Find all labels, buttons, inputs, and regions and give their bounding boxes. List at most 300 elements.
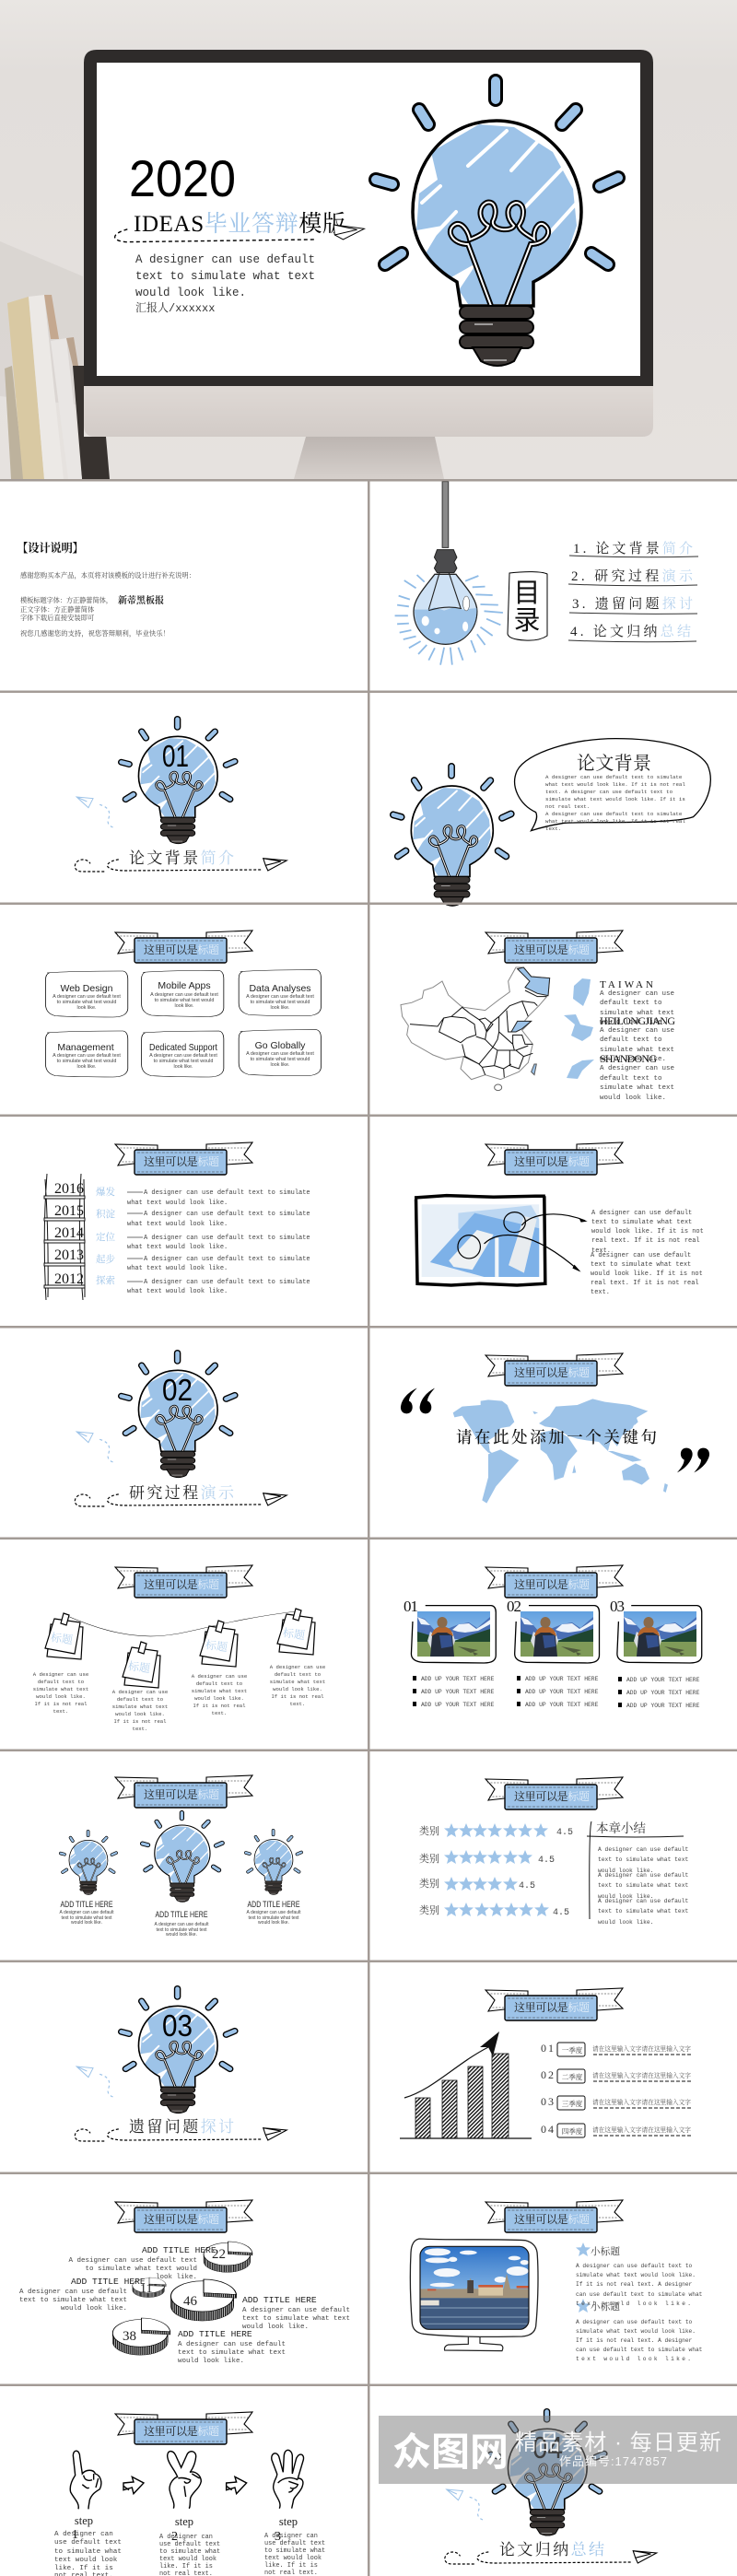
hand-drawn monitor with city photo <box>410 2239 538 2351</box>
annotation text: A designer can use default <box>591 1210 692 1217</box>
card outlines <box>45 970 321 1077</box>
step text: use default text <box>159 2541 220 2548</box>
step numbers: 2 <box>171 2530 178 2544</box>
frame numbers: 02 <box>507 1598 521 1615</box>
title ribbon <box>485 1353 623 1386</box>
bubble text: text. <box>545 825 561 832</box>
annotation text <box>591 1210 704 1296</box>
note 1 <box>45 1613 83 1659</box>
summary panel: would look like. <box>598 1868 653 1874</box>
heading: 【设计说明】 <box>17 541 84 555</box>
step numbers: 1 <box>72 2528 78 2542</box>
rating rows: 4.5 <box>556 1828 573 1838</box>
slide: timeline ladder <box>44 1142 310 1300</box>
note 2: 标题 <box>127 1658 151 1675</box>
card text: A designer can use default text <box>53 994 121 1000</box>
hero bulb <box>376 81 618 366</box>
subheads and stars: 小标题 <box>591 2245 621 2257</box>
chart legend <box>541 2042 692 2137</box>
timeline text: A designer can use default text to simulate <box>144 1279 310 1286</box>
subheads and stars: 小标题 <box>591 2301 621 2313</box>
annotation text: would look like. If it is not <box>591 1270 703 1278</box>
watermark banner: 作品编号:1747857 <box>559 2454 667 2468</box>
step text: to simulate what <box>264 2547 325 2555</box>
step text: A designer can <box>54 2531 113 2538</box>
rating rows: 4.5 <box>519 1881 535 1891</box>
bubble text: what text would look like. If it is not real <box>545 818 685 825</box>
contents list: 1. 论文背景简介 <box>573 540 693 556</box>
note captions: text. <box>212 1710 227 1716</box>
bulb captions: text to simulate what text <box>61 1915 112 1921</box>
pie values: 46 <box>183 2294 197 2309</box>
note 4 <box>277 1609 315 1655</box>
wall background <box>0 0 737 479</box>
bulb <box>393 767 511 906</box>
step labels: step <box>279 2515 298 2528</box>
photo 1 <box>417 1611 490 1657</box>
card text: look like. <box>175 1003 193 1009</box>
title ribbon <box>115 1775 252 1808</box>
stage labels: 定位 <box>96 1232 115 1243</box>
faint plane <box>76 1432 113 1462</box>
card text: look like. <box>271 1005 289 1011</box>
summary panel: A designer can use default <box>598 1898 688 1904</box>
slide: monitor photo <box>410 2200 703 2362</box>
map captions: HEILONGJIANG <box>600 1014 675 1027</box>
bulb captions: ADD TITLE HERE <box>247 1900 300 1910</box>
pie captions <box>19 2245 350 2365</box>
chart legend: 02 <box>541 2068 554 2081</box>
slide: three bulbs <box>60 1775 301 1938</box>
notes text: 字体下载后直接安装即可 <box>20 614 94 622</box>
section 02 slide <box>75 1352 287 1506</box>
frame numbers: 01 <box>404 1598 418 1615</box>
title ribbon <box>485 1777 623 1809</box>
card text: Go Globally <box>255 1040 306 1051</box>
watermark banner: 众图网 <box>392 2430 509 2474</box>
title ribbon <box>485 1565 623 1598</box>
title ribbon <box>485 931 623 963</box>
rating rows: 类别 <box>419 1852 439 1865</box>
bullet list: ADD UP YOUR TEXT HERE <box>525 1702 599 1708</box>
notes text: 正文字体：方正静蕾简体 <box>20 605 95 614</box>
bulb 02 <box>122 1352 235 1478</box>
pie values: 38 <box>123 2329 136 2344</box>
summary panel: A designer can use default <box>598 1846 688 1853</box>
timeline text: what text would look like. <box>127 1288 228 1295</box>
China map <box>401 967 550 1091</box>
title ribbon <box>485 1142 623 1175</box>
stage labels: 起步 <box>96 1253 115 1265</box>
map captions <box>600 979 675 1102</box>
rating rows: 4.5 <box>538 1856 555 1866</box>
contents list: 3. 遗留问题探讨 <box>572 595 693 612</box>
monitor bezel <box>84 50 653 386</box>
bulb captions: text to simulate what text <box>156 1927 207 1933</box>
bubble text: what text would look like. If it is not real <box>545 781 685 788</box>
monitor text: If it is not real text. A designer <box>576 2281 693 2288</box>
card text: look like. <box>77 1064 96 1070</box>
notes text: 新蒂黑板报 <box>118 594 164 606</box>
bubble text: simulate what text would look like. If it is <box>545 796 685 802</box>
ladder years: 2014 <box>54 1225 84 1241</box>
bulb captions: ADD TITLE HERE <box>155 1910 208 1920</box>
rating rows: 4.5 <box>553 1908 569 1918</box>
title ribbon: 这里可以是标题 <box>144 1154 219 1168</box>
title ribbon: 这里可以是标题 <box>144 1577 219 1591</box>
section 03 slide <box>75 1988 287 2141</box>
title ribbon <box>115 931 252 963</box>
pie captions: ADD TITLE HERE <box>178 2329 252 2339</box>
step numbers: 3 <box>275 2530 281 2544</box>
pie captions: would look like. <box>178 2358 244 2365</box>
summary panel <box>587 1821 688 1926</box>
title ribbon: 这里可以是标题 <box>514 943 590 956</box>
monitor text: simulate what text would look like. <box>576 2328 696 2335</box>
card text: to simulate what text would <box>251 1000 310 1005</box>
growth arrow <box>404 2032 499 2098</box>
slide: star ratings <box>419 1777 688 1926</box>
keyword sentence: 请在此处添加一个关键句 <box>456 1428 657 1446</box>
Taiwan shape <box>573 978 591 1006</box>
pie captions: text to simulate what text <box>242 2315 350 2323</box>
title ribbon: 这里可以是标题 <box>514 1365 590 1379</box>
card text: look like. <box>271 1062 289 1068</box>
card text: to simulate what text would <box>57 1000 116 1005</box>
timeline text: what text would look like. <box>127 1221 228 1228</box>
bulb captions: A designer can use default <box>155 1922 209 1927</box>
pie 11 <box>133 2277 166 2298</box>
map captions: default text to <box>600 1036 662 1044</box>
card text: A designer can use default text <box>150 992 218 998</box>
bulb captions: A designer can use default <box>60 1910 114 1915</box>
quote marks <box>401 1388 709 1472</box>
pie 22 <box>204 2242 252 2272</box>
contents list: 2. 研究过程演示 <box>571 568 694 584</box>
map captions: default text to <box>600 1075 662 1083</box>
title ribbon: 这里可以是标题 <box>514 1154 590 1168</box>
number 01: 01 <box>162 739 189 773</box>
timeline text: what text would look like. <box>127 1265 228 1272</box>
note 3: 标题 <box>205 1637 228 1654</box>
dashed trail <box>75 1493 287 1506</box>
chart legend: 请在这里输入文字请在这里输入文字 <box>592 2071 691 2079</box>
bulb captions: would look like. <box>166 1932 197 1938</box>
slide: growth bar chart <box>400 1988 692 2138</box>
card text: look like. <box>174 1064 193 1070</box>
hero: desktop monitor scene <box>0 0 737 479</box>
map captions: A designer can use <box>600 1065 674 1072</box>
section title: 论文背景简介 <box>129 849 234 867</box>
hero title: IDEAS毕业答辩模版 <box>134 211 345 237</box>
faint plane <box>447 2489 484 2520</box>
slide: world map quote <box>401 1353 709 1504</box>
step text: use default text <box>54 2539 122 2547</box>
pie 46 <box>170 2279 237 2321</box>
summary panel: A designer can use default <box>598 1872 688 1879</box>
monitor text: A designer can use default text to <box>576 2319 693 2325</box>
chart legend: 04 <box>541 2123 554 2136</box>
step numbers <box>72 2528 281 2544</box>
note captions: simulate what text <box>112 1704 168 1710</box>
bullet list: ADD UP YOUR TEXT HERE <box>626 1677 700 1683</box>
pie captions: would look like. <box>61 2305 127 2313</box>
contents label box: 录 <box>513 606 541 636</box>
step text <box>54 2531 325 2576</box>
timeline text: A designer can use default text to simulate <box>144 1256 310 1263</box>
map captions: would look like. <box>600 1056 666 1063</box>
bulb captions: would look like. <box>71 1920 102 1926</box>
slide: hanging notes <box>33 1565 325 1732</box>
title ribbon: 这里可以是标题 <box>144 943 219 956</box>
annotation text: would look like. If it is not <box>591 1228 704 1235</box>
chart legend: 请在这里输入文字请在这里输入文字 <box>592 2125 691 2134</box>
card text: A designer can use default text <box>246 994 314 1000</box>
slide: three hand steps <box>54 2412 325 2576</box>
note captions: simulate what text <box>192 1688 247 1694</box>
frame numbers <box>404 1598 625 1615</box>
title ribbon: 这里可以是标题 <box>144 1787 219 1801</box>
map captions: default text to <box>600 1000 662 1007</box>
monitor text: can use default text to simulate what <box>576 2291 703 2298</box>
annotation text: text to simulate what text <box>591 1219 692 1226</box>
pie values: 11 <box>140 2282 152 2296</box>
contents label box <box>508 572 547 640</box>
timeline text: what text would look like. <box>127 1200 228 1207</box>
hero dashed trail and paper plane <box>115 225 364 242</box>
ladder years: 2013 <box>54 1247 84 1263</box>
slide: table of contents <box>395 482 698 665</box>
note captions: If it is not real <box>193 1703 246 1709</box>
title ribbon: 这里可以是标题 <box>144 2424 219 2438</box>
bullet list: ADD UP YOUR TEXT HERE <box>421 1676 495 1682</box>
summary panel: text to simulate what text <box>598 1882 688 1889</box>
title ribbon <box>115 2412 252 2444</box>
monitor text <box>576 2263 703 2362</box>
notes text: 祝您几感谢您的支持，祝您答辩顺利，毕业快乐！ <box>20 629 170 638</box>
chart legend: 三季度 <box>562 2099 583 2108</box>
title ribbon: 这里可以是标题 <box>514 2212 590 2226</box>
timeline text: what text would look like. <box>127 1244 228 1251</box>
map captions: simulate what text <box>600 1084 674 1092</box>
note captions: simulate what text <box>270 1679 325 1685</box>
annotation text: text. <box>591 1289 610 1296</box>
pie values <box>123 2247 226 2344</box>
monitor stand <box>294 437 444 479</box>
bar chart <box>400 2054 532 2138</box>
title ribbon: 这里可以是标题 <box>144 2212 219 2226</box>
hero description: text to simulate what text <box>135 270 315 283</box>
annotation text: real text. If it is not real <box>591 1280 699 1287</box>
step labels: step <box>75 2514 93 2527</box>
title ribbon <box>115 1142 252 1175</box>
card text: Mobile Apps <box>158 980 211 991</box>
map captions: would look like. <box>600 1019 666 1026</box>
timeline text: A designer can use default text to simulate <box>144 1211 310 1218</box>
monitor text: can use default text to simulate what <box>576 2347 703 2353</box>
photo 2 <box>521 1611 593 1657</box>
Shandong shape <box>567 1060 594 1079</box>
speech bubble <box>515 739 710 831</box>
monitor text: text would look like. <box>576 2301 691 2307</box>
timeline text: A designer can use default text to simulate <box>144 1189 310 1197</box>
number 04: 04 <box>532 2430 563 2465</box>
summary panel: would look like. <box>598 1919 653 1926</box>
timeline text <box>127 1189 310 1295</box>
pie captions: to simulate what text would <box>85 2266 197 2273</box>
note captions: A designer can use <box>112 1689 168 1695</box>
note captions: would look like. <box>36 1693 86 1700</box>
note 2 <box>123 1642 160 1688</box>
contents list: 4. 论文归纳总结 <box>570 623 691 639</box>
card text: Data Analyses <box>249 983 311 994</box>
note captions: would look like. <box>115 1711 165 1717</box>
slide: China map <box>401 931 675 1102</box>
step text: text would look <box>264 2555 322 2562</box>
card text: to simulate what text would <box>57 1059 116 1064</box>
frame numbers: 03 <box>610 1598 625 1615</box>
dashed trail <box>75 859 287 872</box>
monitor text: A designer can use default text to <box>576 2263 693 2269</box>
dashed trail <box>75 2128 287 2141</box>
photo frames <box>411 1606 702 1663</box>
card text: look like. <box>77 1005 96 1011</box>
notes text <box>20 571 195 638</box>
note 4: 标题 <box>282 1625 306 1642</box>
chart legend: 四季度 <box>562 2126 583 2136</box>
map captions: would look like. <box>600 1095 666 1102</box>
world map <box>453 1399 668 1504</box>
chart legend: 01 <box>541 2042 554 2055</box>
title ribbon: 这里可以是标题 <box>514 1577 590 1591</box>
note captions: If it is not real <box>34 1701 88 1707</box>
title ribbon <box>485 2200 623 2232</box>
stage labels <box>96 1186 115 1286</box>
note captions: default text to <box>275 1671 321 1678</box>
pie captions: ADD TITLE HERE <box>242 2295 317 2305</box>
note 3 <box>200 1621 238 1667</box>
map captions: TAIWAN <box>600 979 653 990</box>
annotation text: real text. If it is not real <box>591 1237 700 1245</box>
hero year: 2020 <box>129 149 236 207</box>
pie captions: ADD TITLE HERE <box>71 2277 146 2287</box>
rating rows: 类别 <box>419 1824 439 1837</box>
stage labels: 积淀 <box>96 1208 115 1220</box>
bubble text: A designer can use default text to simulate <box>545 811 683 817</box>
summary panel: 本章小结 <box>596 1821 646 1835</box>
note 1: 标题 <box>50 1630 74 1646</box>
note captions: default text to <box>38 1679 84 1685</box>
bulb captions: text to simulate what text <box>248 1915 299 1921</box>
note captions: text. <box>53 1708 68 1715</box>
bubble text <box>545 774 685 832</box>
title ribbon <box>115 1565 252 1598</box>
bubble title: 论文背景 <box>577 753 651 774</box>
card text: A designer can use default text <box>246 1051 314 1057</box>
ladder years: 2016 <box>54 1181 84 1197</box>
section title: 论文归纳总结 <box>499 2541 604 2558</box>
pie captions: A designer can use default text <box>68 2257 197 2265</box>
slide: six service cards <box>45 931 321 1077</box>
card text <box>53 980 314 1070</box>
left bulb <box>61 1832 116 1895</box>
note captions: default text to <box>196 1680 242 1687</box>
step arrows <box>123 2476 247 2494</box>
bullet list: ADD UP YOUR TEXT HERE <box>626 1690 700 1696</box>
map captions: simulate what text <box>600 1010 674 1017</box>
bulb captions: A designer can use default <box>247 1910 301 1915</box>
books <box>5 295 110 479</box>
card text: to simulate what text would <box>154 1059 213 1064</box>
bullet list: ADD UP YOUR TEXT HERE <box>626 1703 700 1709</box>
bulb 04 <box>491 2411 604 2535</box>
summary panel: text to simulate what text <box>598 1908 688 1914</box>
pie captions: text to simulate what text <box>178 2349 286 2357</box>
note captions: default text to <box>117 1696 163 1703</box>
right bulb <box>246 1831 301 1895</box>
summary panel: would look like. <box>598 1893 653 1900</box>
bullet list: ADD UP YOUR TEXT HERE <box>421 1702 495 1708</box>
section title: 遗留问题探讨 <box>129 2117 234 2136</box>
slide: design notes <box>17 541 195 638</box>
note captions: A designer can use <box>33 1671 88 1678</box>
ladder years: 2015 <box>54 1203 84 1219</box>
pie captions: look like. <box>156 2274 197 2281</box>
bubble text: text. A designer can use default text to <box>545 789 673 795</box>
card text: Web Design <box>60 983 113 994</box>
step labels: step <box>175 2515 193 2528</box>
title ribbon <box>485 1988 623 2020</box>
pie captions: ADD TITLE HERE <box>142 2245 216 2255</box>
note captions: would look like. <box>194 1695 244 1702</box>
section 04 slide <box>445 2411 657 2564</box>
notes text: 感谢您购买本产品，本页将对该模板的设计进行补充说明： <box>20 571 195 580</box>
bulb captions <box>60 1900 301 1938</box>
chart legend: 请在这里输入文字请在这里输入文字 <box>592 2098 691 2106</box>
subheads and stars <box>576 2242 621 2313</box>
bullet list: ADD UP YOUR TEXT HERE <box>525 1689 599 1695</box>
map captions: A designer can use <box>600 990 674 998</box>
title ribbon <box>115 2200 252 2232</box>
rating rows: 类别 <box>419 1903 439 1916</box>
notes text: 模板标题字体：方正静蕾简体， <box>20 596 112 605</box>
summary panel: text to simulate what text <box>598 1856 688 1863</box>
step text: text would look <box>159 2556 216 2563</box>
bubble text: not real text. <box>545 803 590 810</box>
step text: use default text <box>264 2540 325 2547</box>
faint plane <box>76 2067 113 2097</box>
note captions: text. <box>290 1701 305 1707</box>
watermark banner: 精品素材 · 每日更新 <box>515 2430 721 2455</box>
stage labels: 爆发 <box>96 1186 115 1198</box>
pie captions: A designer can use default <box>242 2307 350 2314</box>
rating rows: 类别 <box>419 1877 439 1890</box>
map captions: A designer can use <box>600 1027 674 1035</box>
note captions: If it is not real <box>113 1718 167 1725</box>
faint plane <box>76 797 113 827</box>
pie values: 22 <box>212 2247 226 2262</box>
slide: speech bubble <box>393 739 710 906</box>
hero description: 汇报人/xxxxxx <box>135 300 215 315</box>
slide: photo with annotations <box>415 1142 704 1296</box>
pie captions: text to simulate what text <box>19 2297 127 2304</box>
note captions: A designer can use <box>270 1664 325 1670</box>
pie captions: A designer can use default <box>19 2289 127 2296</box>
annotation text: text. <box>591 1247 611 1255</box>
Heilongjiang shape <box>564 1014 593 1041</box>
monitor screen <box>97 63 640 376</box>
hanging bulb with rays <box>395 482 503 665</box>
